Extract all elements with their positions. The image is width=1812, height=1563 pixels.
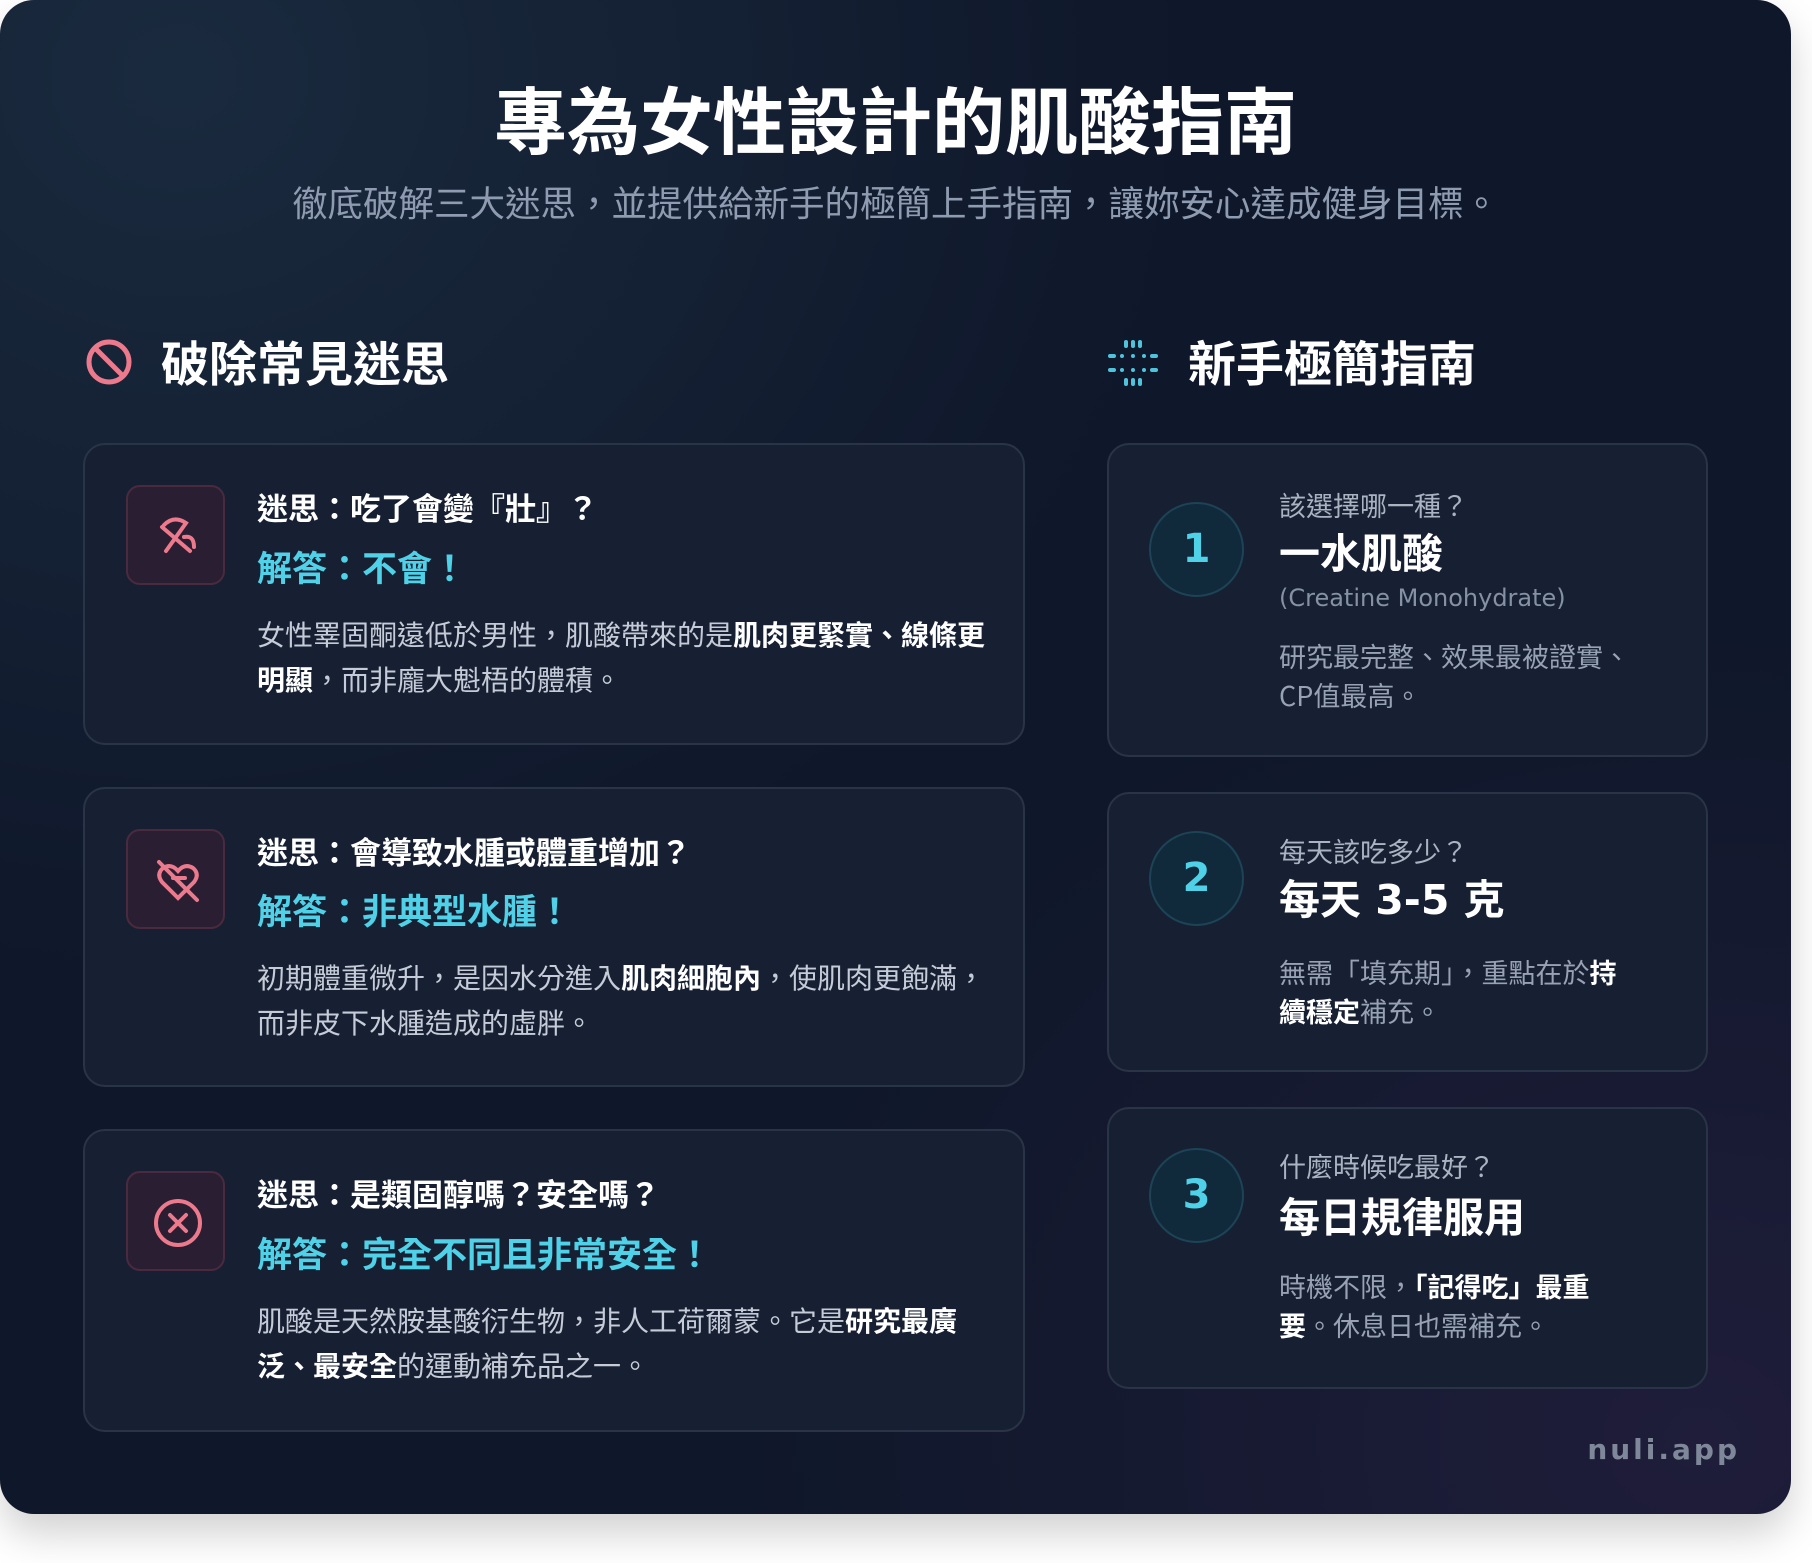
panel: myth 1 <box>83 443 1025 745</box>
panel: step 2 <box>1107 792 1708 1072</box>
panel: myth 2 <box>83 787 1025 1087</box>
myth title: 迷思：吃了會變『壯』？ <box>257 484 598 529</box>
icon: dots <box>1108 340 1158 386</box>
title: 專為女性設計的肌酸指南 <box>494 64 1297 170</box>
description: 時機不限，「記得吃」最重要。休息日也需補充。 <box>1279 1266 1590 1344</box>
answer: 一水肌酸 <box>1279 530 1443 578</box>
heading text: 新手極簡指南 <box>1188 325 1476 395</box>
question: 該選擇哪一種？ <box>1279 485 1468 524</box>
answer: 解答：非典型水腫！ <box>257 884 572 935</box>
heading: guide <box>1108 325 1476 395</box>
number badge: 2 <box>1183 855 1210 901</box>
icon: prohibited <box>86 340 132 384</box>
explanation: 女性睪固酮遠低於男性，肌酸帶來的是肌肉更緊實、線條更明顯，而非龐大魁梧的體積。 <box>257 614 985 699</box>
answer: 解答：不會！ <box>257 541 467 592</box>
number badge <box>1149 1148 1244 1243</box>
icon: muscle crossed <box>126 485 225 585</box>
number badge <box>1149 831 1244 926</box>
english name: (Creatine Monohydrate) <box>1279 584 1566 612</box>
number badge: 1 <box>1183 526 1210 572</box>
myth title: 迷思：是類固醇嗎？安全嗎？ <box>257 1170 660 1215</box>
footer brand: nuli.app <box>1587 1433 1740 1466</box>
explanation: 肌酸是天然胺基酸衍生物，非人工荷爾蒙。它是研究最廣泛、最安全的運動補充品之一。 <box>257 1300 957 1385</box>
myth title: 迷思：會導致水腫或體重增加？ <box>257 828 691 873</box>
subtitle: 徹底破解三大迷思，並提供給新手的極簡上手指南，讓妳安心達成健身目標。 <box>292 176 1499 227</box>
question: 每天該吃多少？ <box>1279 831 1468 870</box>
number badge <box>1149 502 1244 597</box>
panel: step 1 <box>1107 443 1708 757</box>
icon: heart crossed <box>126 829 225 929</box>
answer: 解答：完全不同且非常安全！ <box>257 1227 712 1278</box>
heading text: 破除常見迷思 <box>161 325 449 395</box>
heading: myths <box>86 325 449 395</box>
number badge: 3 <box>1183 1172 1210 1218</box>
panel: myth 3 <box>83 1129 1025 1432</box>
description: 研究最完整、效果最被證實、CP值最高。 <box>1279 636 1630 714</box>
question: 什麼時候吃最好？ <box>1279 1146 1495 1185</box>
answer: 每天 3-5 克 <box>1279 876 1505 924</box>
description: 無需「填充期」，重點在於持續穩定補充。 <box>1279 952 1616 1030</box>
panel: step 3 <box>1107 1107 1708 1389</box>
icon: x circle <box>126 1171 225 1271</box>
explanation: 初期體重微升，是因水分進入肌肉細胞內，使肌肉更飽滿，而非皮下水腫造成的虛胖。 <box>257 957 985 1042</box>
answer: 每日規律服用 <box>1279 1194 1525 1242</box>
